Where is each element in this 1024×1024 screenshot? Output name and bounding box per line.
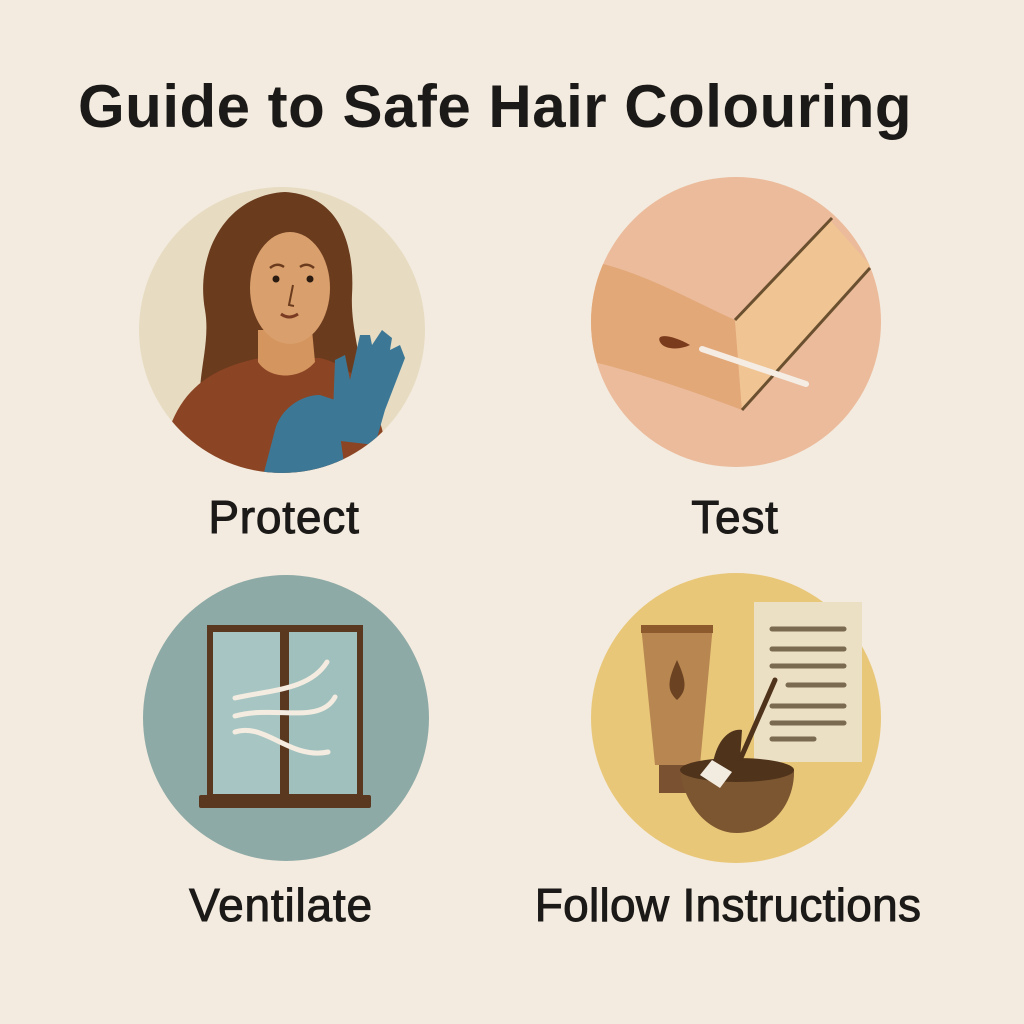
label: follow instructions: Follow Instructions	[535, 879, 921, 931]
illustrations	[139, 177, 881, 863]
label: ventilate: Ventilate	[189, 879, 373, 931]
icon: protect woman with gloves	[139, 187, 425, 480]
icon: test arm with swab	[585, 177, 881, 467]
label: test: Test	[691, 491, 779, 543]
icon: follow instructions	[591, 573, 881, 863]
title: Guide to Safe Hair Colouring	[78, 73, 912, 140]
label: protect: Protect	[208, 491, 360, 543]
icon: window ventilate	[143, 575, 429, 861]
